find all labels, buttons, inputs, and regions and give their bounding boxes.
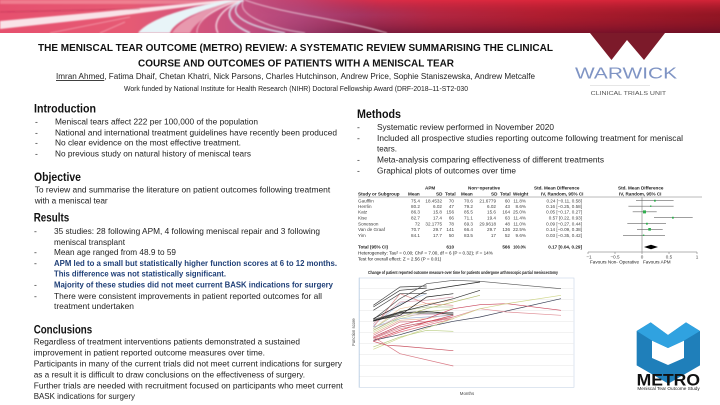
panel: conclusions: as a result it is difficult to draw conclusions on the effectiveness of surgery. bbox=[34, 370, 305, 380]
panel: results: treatment undertaken bbox=[54, 301, 134, 311]
panel: introduction: National and international treatment guidelines have recently been produced bbox=[55, 127, 337, 137]
panel: methods: Methods bbox=[357, 109, 401, 121]
panel: conclusions: Conclusions bbox=[34, 324, 92, 336]
forest plot table rows: 15.8 bbox=[433, 210, 442, 214]
forest plot heterogeneity notes: Test for overall effect: Z = 2.56 (P = 0.01) bbox=[358, 257, 442, 262]
forest plot: SD bbox=[436, 192, 443, 196]
panel: objective: with a meniscal tear bbox=[34, 196, 108, 206]
panel: methods: Meta-analysis comparing effectiveness of different treatments bbox=[377, 155, 604, 165]
forest plot table rows: 0.57 [0.22, 0.93] bbox=[549, 215, 582, 220]
forest plot table rows: 141 bbox=[446, 227, 454, 232]
forest plot: Std. Mean Difference bbox=[534, 186, 580, 190]
forest plot table rows: 43 bbox=[505, 204, 510, 209]
forest plot total row: Total (95% CI) bbox=[358, 245, 389, 250]
forest plot table rows: 82.7 bbox=[411, 215, 420, 220]
panel: results: This difference was not statistically significant. bbox=[54, 269, 226, 279]
forest plot graph: 0 bbox=[641, 254, 644, 260]
forest plot table rows: 18.4532 bbox=[425, 198, 442, 203]
forest plot table rows: 11.0% bbox=[513, 221, 526, 226]
forest plot: Study or Subgroup bbox=[358, 192, 400, 196]
forest plot total row: 100.0% bbox=[513, 245, 526, 250]
forest plot table rows: 136 bbox=[502, 227, 510, 232]
funding statement: Work funded by National Institute for Health Research (NIHR) Doctoral Fellowship Award (DRF-2018–11-ST2-030 bbox=[124, 84, 468, 93]
forest plot table rows: 83.5 bbox=[464, 233, 473, 238]
forest plot table rows: 22.5% bbox=[513, 227, 526, 232]
forest plot table rows: 52 bbox=[505, 233, 510, 238]
forest plot table rows: 156 bbox=[446, 210, 454, 214]
line chart: patient reported outcomes over time: Function score bbox=[351, 318, 356, 346]
forest plot table rows: 29.9618 bbox=[479, 221, 496, 226]
forest plot table rows: Sonesson bbox=[358, 221, 379, 226]
forest plot total row: 610 bbox=[446, 245, 454, 250]
forest plot total row: 566 bbox=[502, 245, 510, 250]
panel: introduction: - bbox=[35, 138, 38, 148]
panel: results: - bbox=[34, 291, 37, 301]
panel: results: meniscal transplant bbox=[54, 237, 126, 247]
forest plot table rows: 60 bbox=[505, 198, 510, 203]
panel: conclusions bbox=[34, 324, 344, 401]
forest plot table rows: 6.02 bbox=[487, 204, 496, 209]
forest plot table rows: 47 bbox=[449, 204, 454, 209]
forest plot table rows: 0.16 [−0.25, 0.58] bbox=[546, 204, 582, 209]
panel: methods: Graphical plots of outcomes over time bbox=[377, 166, 516, 176]
forest plot table rows: Van de Graaf bbox=[358, 227, 386, 232]
forest plot table rows: 19.4 bbox=[487, 215, 496, 220]
forest plot table rows: Yim bbox=[358, 233, 366, 238]
forest plot table rows: 164 bbox=[502, 210, 510, 214]
forest plot table rows: Herrlin bbox=[358, 204, 372, 209]
forest plot: Mean bbox=[461, 192, 473, 196]
forest plot table rows: 48 bbox=[505, 221, 510, 226]
panel: methods: - bbox=[357, 155, 360, 165]
forest plot table rows: 70.7 bbox=[411, 227, 420, 232]
forest plot table rows: 86.3 bbox=[411, 210, 420, 214]
forest plot table rows: 66 bbox=[449, 215, 454, 220]
panel: results: Results bbox=[34, 213, 69, 225]
forest plot heterogeneity notes: Heterogeneity: Tau² = 0.00; Chi² = 7.00, df = 6 (P = 0.32); I² = 14% bbox=[358, 251, 493, 256]
forest plot graph: −0.5 bbox=[610, 254, 620, 260]
panel: conclusions: Participants in many of the current trials did not meet current indications for surgery bbox=[34, 359, 343, 369]
forest plot total row: 0.17 [0.04, 0.29] bbox=[548, 245, 582, 250]
logo: Warwick Clinical Trials Unit: CLINICAL TRIALS UNIT bbox=[591, 91, 667, 97]
panel: results: - bbox=[34, 226, 37, 236]
forest plot table rows: 75.4 bbox=[411, 198, 420, 203]
forest plot table rows: 29.7 bbox=[433, 227, 442, 232]
panel: introduction: No previous study on natural history of meniscal tears bbox=[55, 149, 251, 159]
forest plot: IV, Random, 95% CI bbox=[541, 192, 583, 196]
forest plot table rows: 78 bbox=[449, 221, 454, 226]
forest plot: IV, Random, 95% CI bbox=[619, 192, 661, 196]
panel: results: 35 studies: 28 following APM, 4 following meniscal repair and 3 following bbox=[54, 226, 320, 236]
forest plot table rows: 0.05 [−0.17, 0.27] bbox=[546, 210, 582, 214]
forest plot table rows: 66.4 bbox=[464, 227, 473, 232]
forest plot: Total bbox=[500, 192, 511, 196]
panel: results: - bbox=[34, 247, 37, 257]
panel: results: - bbox=[34, 280, 37, 290]
forest plot table rows: 70 bbox=[449, 198, 454, 203]
panel: methods: tears. bbox=[377, 144, 397, 154]
panel: objective bbox=[34, 172, 331, 206]
forest plot: Weight bbox=[513, 192, 529, 196]
forest plot table rows: 32.1775 bbox=[425, 221, 442, 226]
line chart: patient reported outcomes over time: Change of patient reported outcome measure over time for patients undergone arthroscopic partial meniscectomy bbox=[368, 270, 558, 275]
forest plot table rows: 79.2 bbox=[464, 204, 473, 209]
panel: results: There were consistent improvements in patient reported outcomes for all bbox=[54, 291, 322, 301]
forest plot table rows: 17.7 bbox=[433, 233, 442, 238]
forest plot table rows: Kise bbox=[358, 215, 367, 220]
forest plot table rows: 17.4 bbox=[433, 215, 442, 220]
panel: methods bbox=[357, 109, 683, 176]
forest plot table rows: 70.6 bbox=[464, 198, 473, 203]
forest plot: Std. Mean Difference bbox=[618, 186, 664, 190]
title: COURSE AND OUTCOMES OF PATIENTS WITH A MENISCAL TEAR bbox=[138, 58, 454, 70]
logo: Warwick Clinical Trials Unit bbox=[575, 33, 678, 97]
panel: conclusions: improvement in patient reported outcome measures over time. bbox=[34, 348, 265, 358]
panel: introduction: Meniscal tears affect 222 per 100,000 of the population bbox=[55, 116, 258, 126]
forest plot bbox=[351, 186, 702, 396]
forest plot table rows: 0.03 [−0.35, 0.42] bbox=[546, 233, 582, 238]
forest plot table rows: 6.02 bbox=[433, 204, 442, 209]
forest plot table rows: 69.3 bbox=[464, 221, 473, 226]
forest plot graph: Favours APM bbox=[643, 260, 671, 265]
panel: methods: Systematic review performed in November 2020 bbox=[377, 122, 554, 132]
panel: results: Mean age ranged from 48.9 to 59 bbox=[54, 247, 176, 257]
authors: Imran Ahmed, Fatima Dhaif, Chetan Khatri, Nick Parsons, Charles Hutchinson, Andrew Price, Sophie Staniszewska, Andrew Metcalfe bbox=[56, 71, 535, 81]
forest plot graph bbox=[586, 197, 699, 265]
forest plot: SD bbox=[491, 192, 498, 196]
forest plot table rows: 85.5 bbox=[464, 210, 473, 214]
panel: introduction: - bbox=[35, 116, 38, 126]
forest plot table rows: 9.6% bbox=[516, 233, 526, 238]
forest plot: Non−operative bbox=[468, 186, 500, 190]
forest plot table rows: 50 bbox=[449, 233, 454, 238]
forest plot table rows: 0.09 [−0.27, 0.44] bbox=[546, 221, 582, 226]
panel: conclusions: BASK indications for surgery bbox=[34, 391, 136, 401]
forest plot table rows: 80.2 bbox=[411, 204, 420, 209]
panel: introduction bbox=[34, 104, 337, 159]
forest plot table rows: 0.14 [−0.09, 0.38] bbox=[546, 227, 582, 232]
logo: METRO study bbox=[637, 322, 701, 391]
forest plot table rows: 8.6% bbox=[516, 204, 526, 209]
panel: results: - bbox=[34, 258, 37, 268]
panel: objective: To review and summarise the literature on patient outcomes following treatment bbox=[35, 185, 331, 195]
panel: methods: - bbox=[357, 166, 360, 176]
panel: methods: - bbox=[357, 133, 360, 143]
logo: METRO study: Meniscal Tear Outcome Study bbox=[637, 386, 701, 391]
panel: introduction: - bbox=[35, 127, 38, 137]
forest plot table rows: 15.6 bbox=[487, 210, 496, 214]
forest plot total row bbox=[358, 245, 582, 250]
panel: introduction: - bbox=[35, 149, 38, 159]
forest plot: Mean bbox=[408, 192, 420, 196]
forest plot graph: −1 bbox=[586, 254, 592, 260]
line chart: patient reported outcomes over time: Months bbox=[460, 391, 475, 396]
forest plot heterogeneity notes bbox=[358, 251, 493, 262]
logo: Warwick Clinical Trials Unit: WARWICK bbox=[575, 66, 678, 82]
panel: methods: - bbox=[357, 122, 360, 132]
forest plot graph: Favours Non- Operative bbox=[590, 260, 639, 265]
forest plot table rows bbox=[358, 198, 582, 238]
forest plot table rows: 21.6779 bbox=[479, 198, 496, 203]
forest plot table rows: 25.0% bbox=[513, 210, 526, 214]
forest plot table rows: 71.1 bbox=[464, 215, 473, 220]
forest plot table rows: 11.8% bbox=[513, 198, 526, 203]
forest plot table rows: 72 bbox=[415, 221, 420, 226]
forest plot table rows: 63 bbox=[505, 215, 510, 220]
panel: methods: Included all prospective studies reporting outcome following treatment for meniscal bbox=[377, 133, 683, 143]
forest plot table rows: 17 bbox=[491, 233, 496, 238]
panel: conclusions: Further trials are needed with recruitment focused on participants who meet current bbox=[34, 380, 344, 390]
forest plot graph: 0.5 bbox=[666, 254, 673, 260]
panel: results bbox=[34, 213, 337, 311]
forest plot: APM bbox=[425, 186, 435, 190]
forest plot table rows: Gaufflin bbox=[358, 198, 374, 203]
forest plot graph: 1 bbox=[696, 254, 699, 260]
panel: results: APM led to a small but statistically higher function scores at 6 to 12 months. bbox=[54, 258, 337, 268]
forest plot table rows: 29.7 bbox=[487, 227, 496, 232]
forest plot table rows: Katz bbox=[358, 210, 368, 214]
panel: results: Majority of these studies did not meet current BASK indications for surgery bbox=[54, 280, 333, 290]
forest plot table rows: 0.24 [−0.11, 0.58] bbox=[546, 198, 582, 203]
logo: METRO study: METRO bbox=[637, 371, 700, 390]
line chart: patient reported outcomes over time bbox=[351, 270, 574, 396]
panel: objective: Objective bbox=[34, 172, 81, 184]
panel: introduction: Introduction bbox=[34, 104, 96, 116]
forest plot table rows: 84.1 bbox=[411, 233, 420, 238]
panel: introduction: No clear evidence on the most effective treatment. bbox=[55, 138, 241, 148]
title: THE MENISCAL TEAR OUTCOME (METRO) REVIEW: A SYSTEMATIC REVIEW SUMMARISING THE CLINICAL bbox=[38, 42, 554, 54]
panel: conclusions: Regardless of treatment interventions patients demonstrated a sustained bbox=[34, 336, 300, 346]
forest plot: Total bbox=[445, 192, 456, 196]
header banner bbox=[0, 0, 720, 33]
forest plot table rows: 11.4% bbox=[513, 215, 526, 220]
title bbox=[38, 42, 554, 70]
